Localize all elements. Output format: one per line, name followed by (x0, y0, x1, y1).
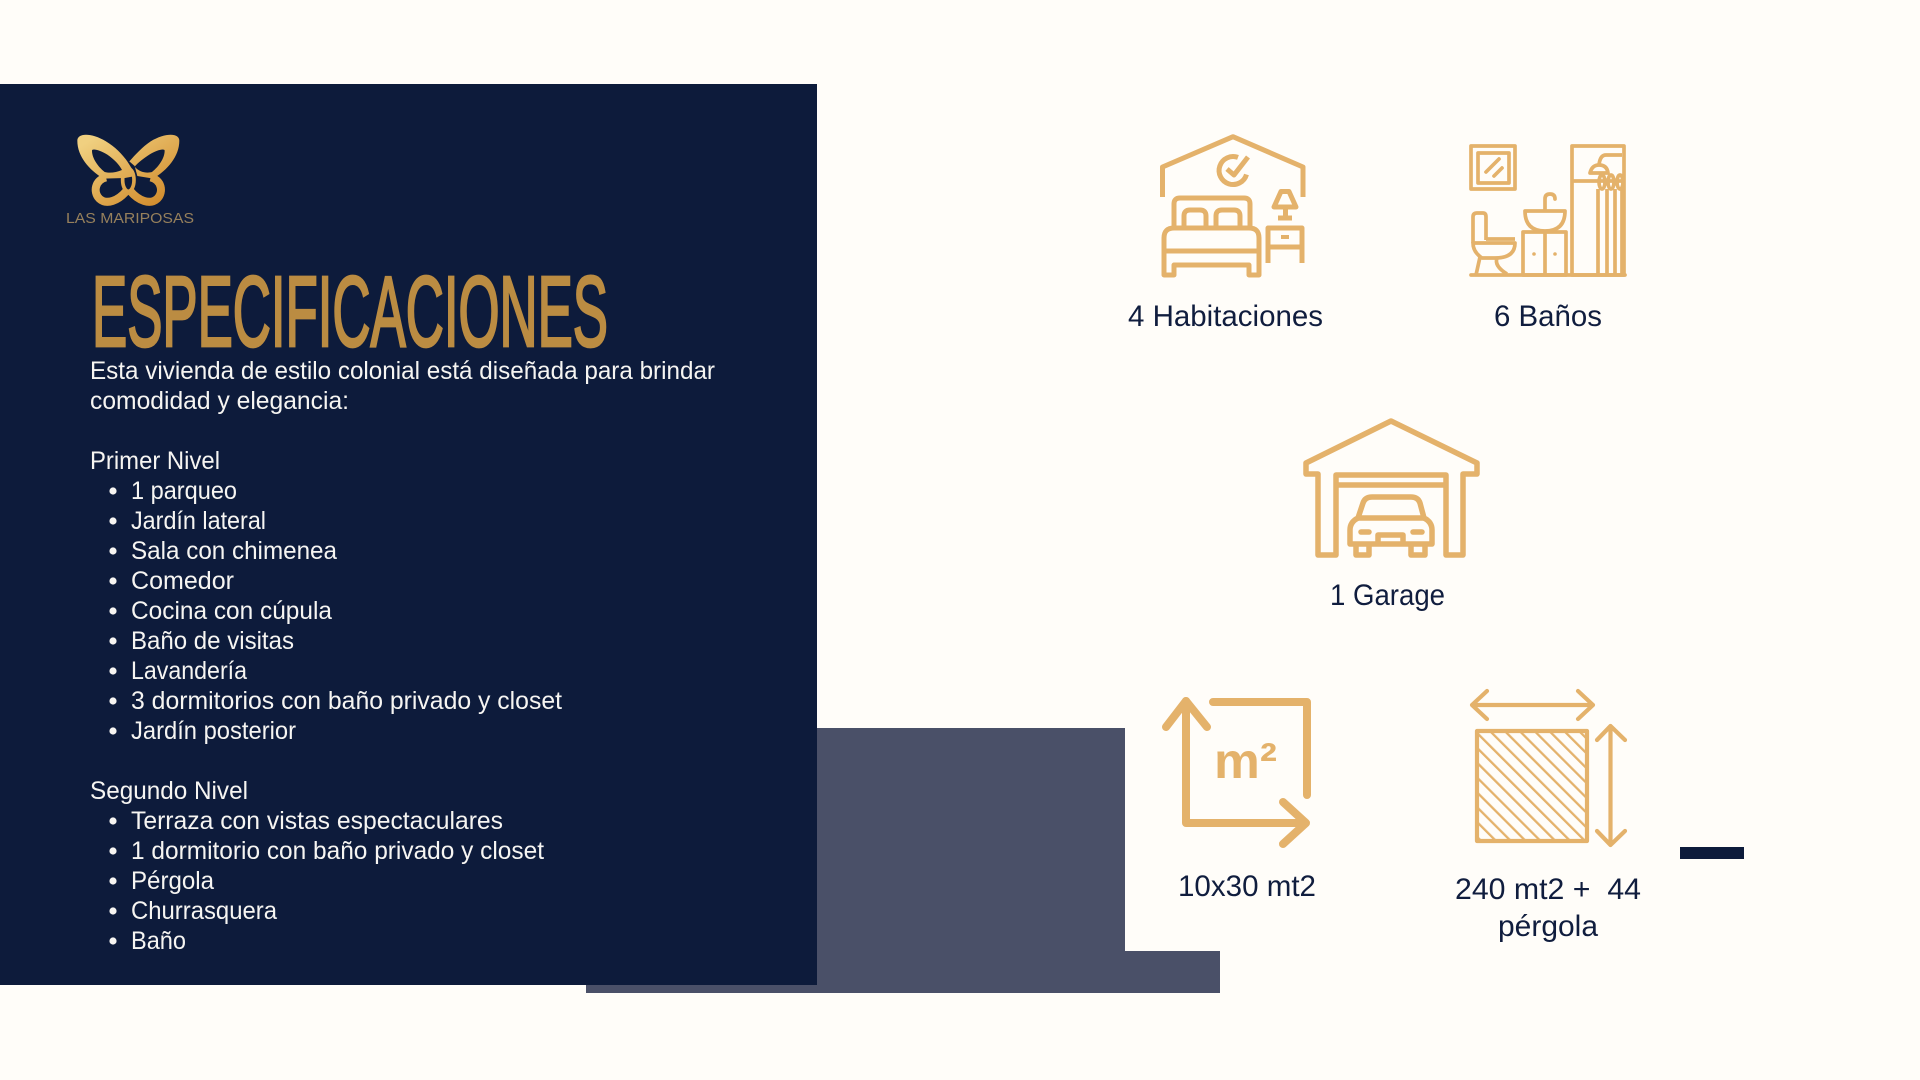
title: ESPECIFICACIONES (92, 256, 608, 368)
label: 1 Garage: 1 Garage (1330, 579, 1445, 612)
intro text: comodidad y elegancia: (90, 387, 349, 415)
first level list: Baño de visitas (131, 627, 294, 655)
icon: square meters (1166, 701, 1307, 844)
first level list: Jardín lateral (131, 507, 266, 535)
label: 240 mt2 + 44 pérgola: 240 mt2 + 44 (1455, 873, 1641, 906)
first level list: Primer Nivel (90, 447, 220, 475)
second level list (90, 777, 544, 955)
second level list: Pérgola (131, 867, 214, 895)
logo wordmark: LAS MARIPOSAS (66, 210, 194, 227)
panel: specifications (0, 84, 817, 985)
first level list: Lavandería (131, 657, 247, 685)
second level list: Churrasquera (131, 897, 277, 925)
intro text: Esta vivienda de estilo colonial está diseñada para brindar (90, 357, 715, 385)
second level list: Baño (131, 927, 186, 955)
first level list: Comedor (131, 567, 234, 595)
second level list: Segundo Nivel (90, 777, 248, 805)
icon: butterfly (77, 135, 179, 202)
first level list (90, 447, 562, 745)
intro text (90, 357, 715, 415)
logo: Las Mariposas (66, 135, 194, 227)
first level list: Cocina con cúpula (131, 597, 332, 625)
icon: bedroom (1162, 137, 1303, 275)
icon: pergola area (1472, 691, 1625, 845)
label: 240 mt2 + 44 pérgola: pérgola (1498, 910, 1598, 943)
label: 6 Baños: 6 Baños (1494, 300, 1602, 333)
second level list: Terraza con vistas espectaculares (131, 807, 503, 835)
first level list: Sala con chimenea (131, 537, 337, 565)
label: 240 mt2 + 44 pérgola (1455, 873, 1641, 943)
first level list: Jardín posterior (131, 717, 296, 745)
decorative gray block behind panel (586, 728, 1220, 993)
label: 10x30 mt2: 10x30 mt2 (1178, 870, 1316, 903)
first level list: 1 parqueo (131, 477, 237, 505)
label: 4 Habitaciones: 4 Habitaciones (1128, 300, 1323, 333)
icon: square meters: m² (1214, 733, 1277, 789)
second level list: 1 dormitorio con baño privado y closet (131, 837, 544, 865)
icon: garage (1306, 421, 1477, 555)
icon: bathroom (1471, 146, 1625, 275)
first level list: 3 dormitorios con baño privado y closet (131, 687, 562, 715)
accent dash (1680, 847, 1744, 859)
